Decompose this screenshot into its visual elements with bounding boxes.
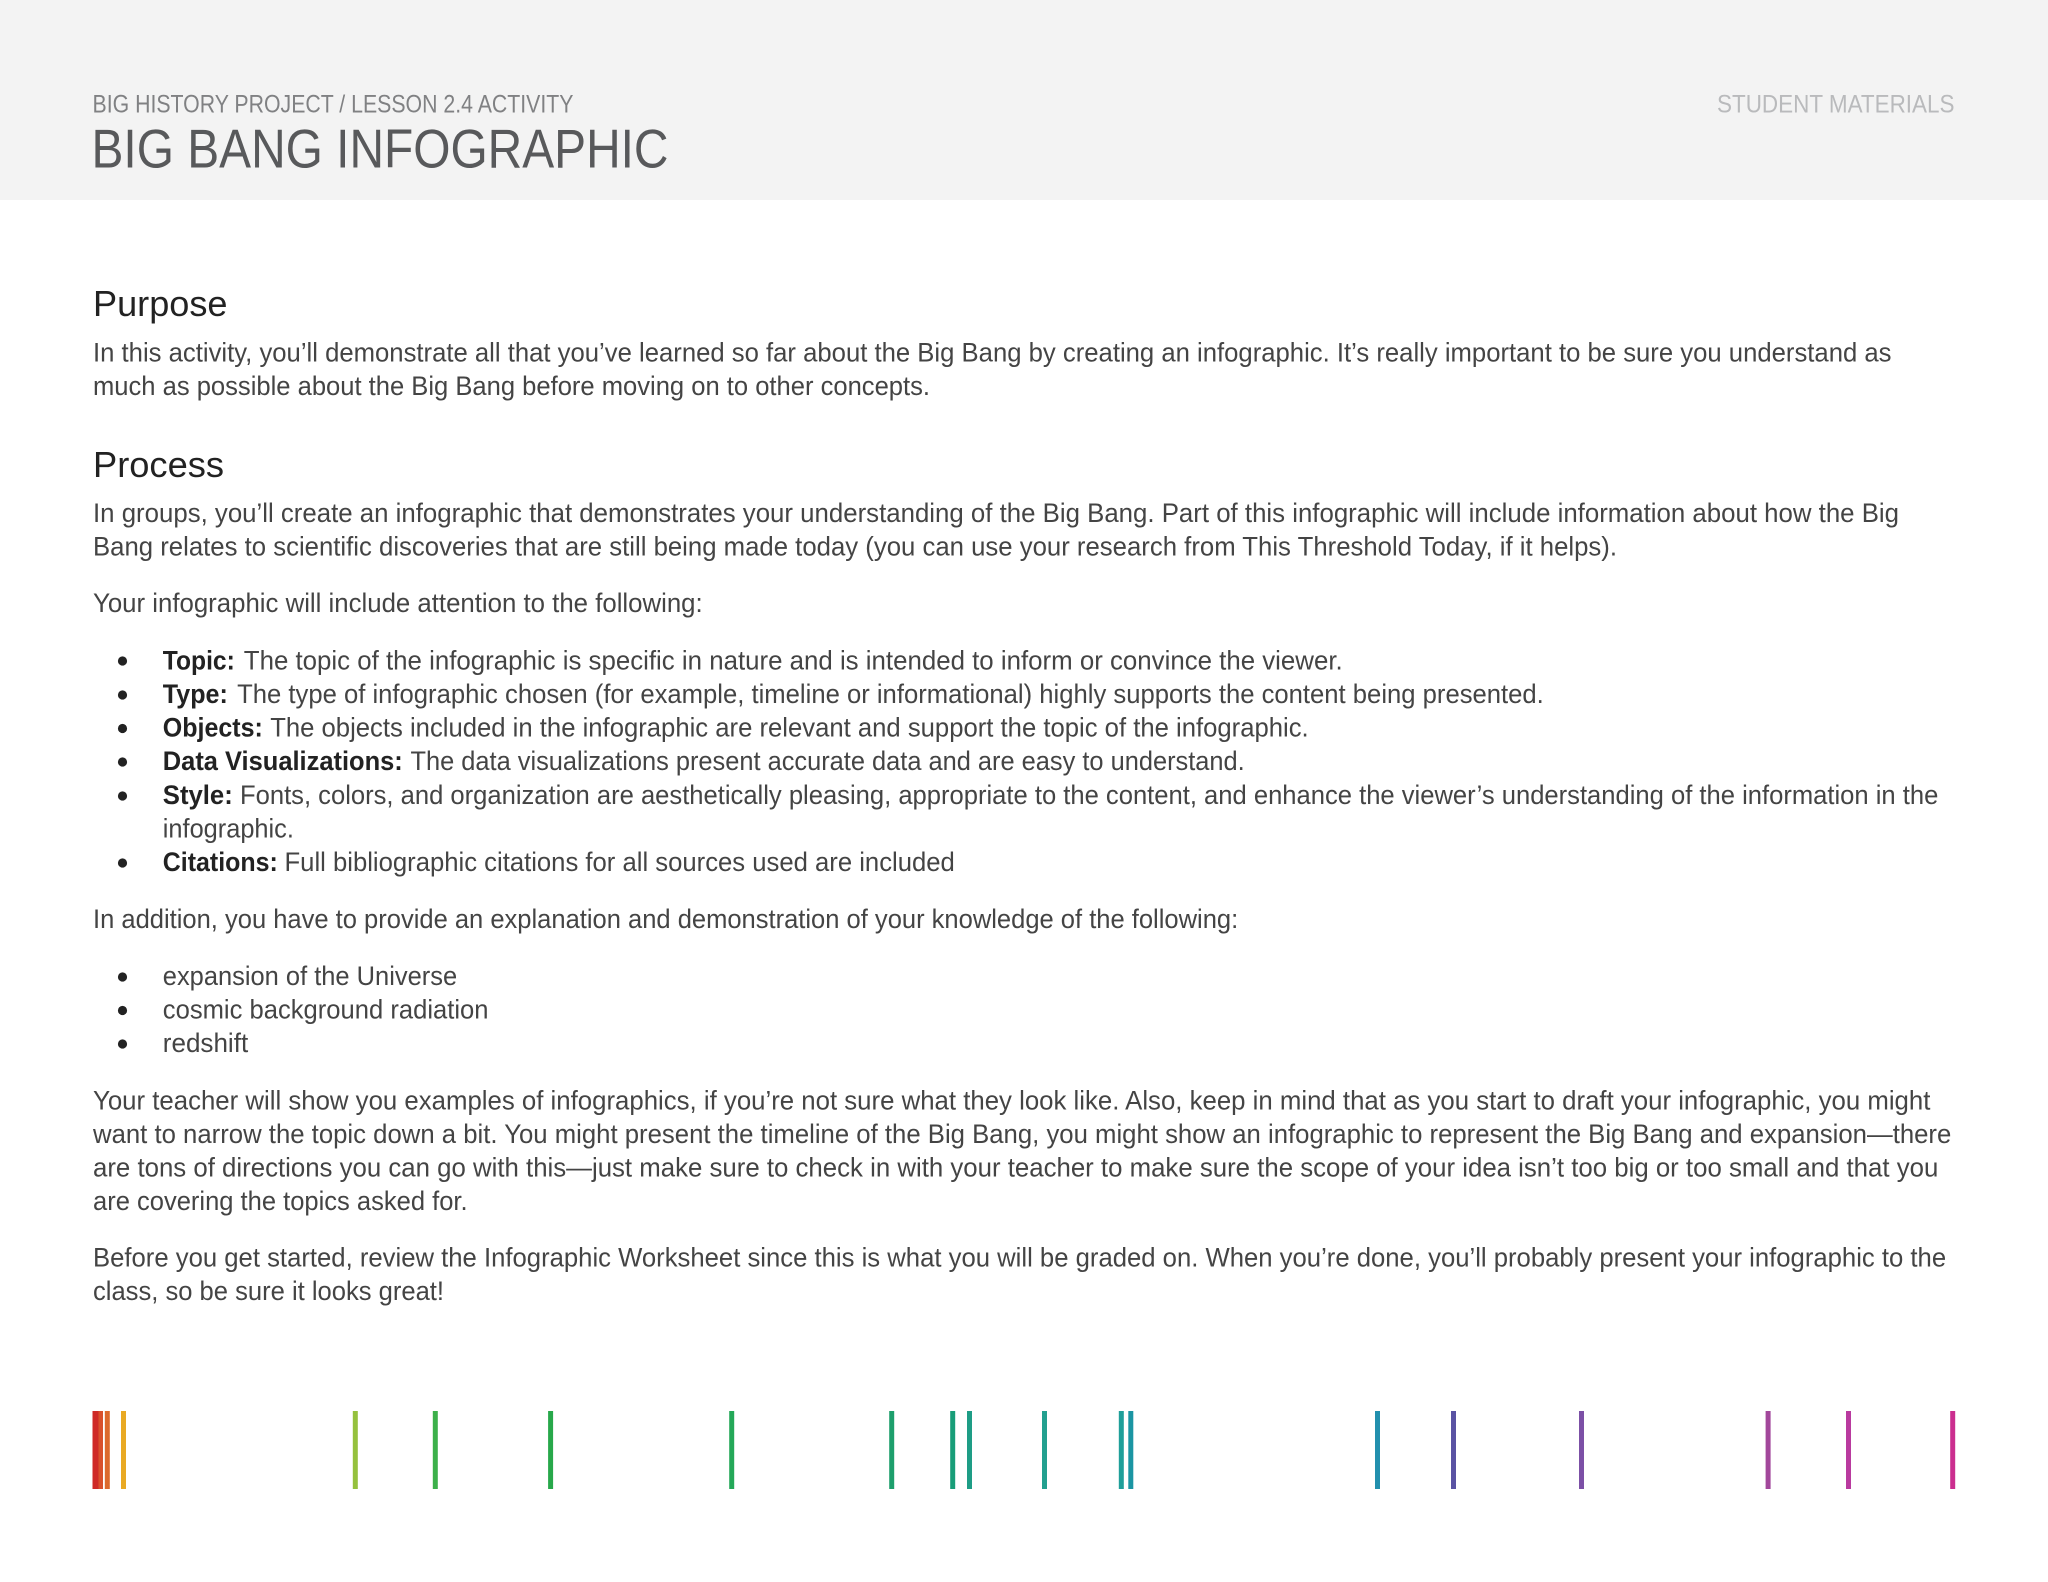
section: purpose [93, 283, 1892, 401]
purpose heading: Purpose [93, 283, 228, 324]
closing paragraph: class, so be sure it looks great! [93, 1276, 444, 1306]
knowledge bullet list [118, 961, 489, 1058]
criteria bullet list: infographic. [163, 813, 294, 843]
attention sentence: Your infographic will include attention to the following: [93, 588, 703, 618]
criteria bullet list: Objects: [163, 713, 263, 743]
criteria bullet list: The data visualizations present accurate data and are easy to understand. [410, 746, 1245, 776]
criteria bullet list: Full bibliographic citations for all sources used are included [284, 847, 955, 877]
lesson label: BIG HISTORY PROJECT / LESSON 2.4 ACTIVITY [92, 91, 574, 119]
criteria bullet list: The type of infographic chosen (for example, timeline or informational) highly supports the content being presented. [237, 679, 1544, 709]
closing paragraph: Before you get started, review the Infographic Worksheet since this is what you will be graded on. When you’re done, you’ll probably present your infographic to the [93, 1242, 1946, 1272]
criteria bullet list: Topic: [163, 645, 235, 675]
process intro: Bang relates to scientific discoveries that are still being made today (you can use your research from This Threshold Today, if it helps). [93, 531, 1617, 561]
title: BIG BANG INFOGRAPHIC [92, 118, 668, 180]
process heading: Process [93, 444, 224, 485]
criteria bullet list: The objects included in the infographic are relevant and support the topic of the infographic. [270, 713, 1309, 743]
teacher paragraph [92, 1086, 1951, 1216]
criteria bullet list: Fonts, colors, and organization are aesthetically pleasing, appropriate to the content, and enhance the viewer’s understanding of the information in the [240, 780, 1938, 810]
closing paragraph [93, 1242, 1946, 1306]
knowledge bullet list: redshift [163, 1028, 249, 1058]
student materials label: STUDENT MATERIALS [1717, 91, 1954, 119]
criteria bullet list: Data Visualizations: [163, 746, 403, 776]
purpose text [93, 338, 1892, 401]
criteria bullet list: The topic of the infographic is specific in nature and is intended to inform or convince the viewer. [244, 645, 1343, 675]
criteria bullet list: Style: [163, 780, 233, 810]
knowledge bullet list: expansion of the Universe [163, 961, 457, 991]
teacher paragraph: Your teacher will show you examples of infographics, if you’re not sure what they look like. Also, keep in mind that as you start to draft your infographic, you might [93, 1086, 1931, 1116]
criteria bullet list: Type: [163, 679, 228, 709]
process intro: In groups, you’ll create an infographic that demonstrates your understanding of the Big Bang. Part of this infographic will include information about how the Big [93, 498, 1899, 528]
teacher paragraph: want to narrow the topic down a bit. You might present the timeline of the Big Bang, you might show an infographic to represent the Big Bang and expansion—there [92, 1119, 1951, 1149]
criteria bullet list: Citations: [163, 847, 278, 877]
header band [0, 0, 2048, 200]
teacher paragraph: are tons of directions you can go with this—just make sure to check in with your teacher to make sure the scope of your idea isn’t too big or too small and that you [93, 1153, 1938, 1183]
purpose text: much as possible about the Big Bang before moving on to other concepts. [93, 371, 930, 401]
section: process [92, 444, 1951, 1306]
criteria bullet list [118, 645, 1938, 877]
knowledge bullet list: cosmic background radiation [163, 995, 489, 1025]
purpose text: In this activity, you’ll demonstrate all that you’ve learned so far about the Big Bang by creating an infographic. It’s really important to be sure you understand as [93, 338, 1892, 368]
colored timeline bars [92, 1411, 1955, 1489]
process intro [93, 498, 1899, 561]
teacher paragraph: are covering the topics asked for. [93, 1186, 468, 1216]
in addition sentence: In addition, you have to provide an explanation and demonstration of your knowledge of the following: [93, 904, 1238, 934]
